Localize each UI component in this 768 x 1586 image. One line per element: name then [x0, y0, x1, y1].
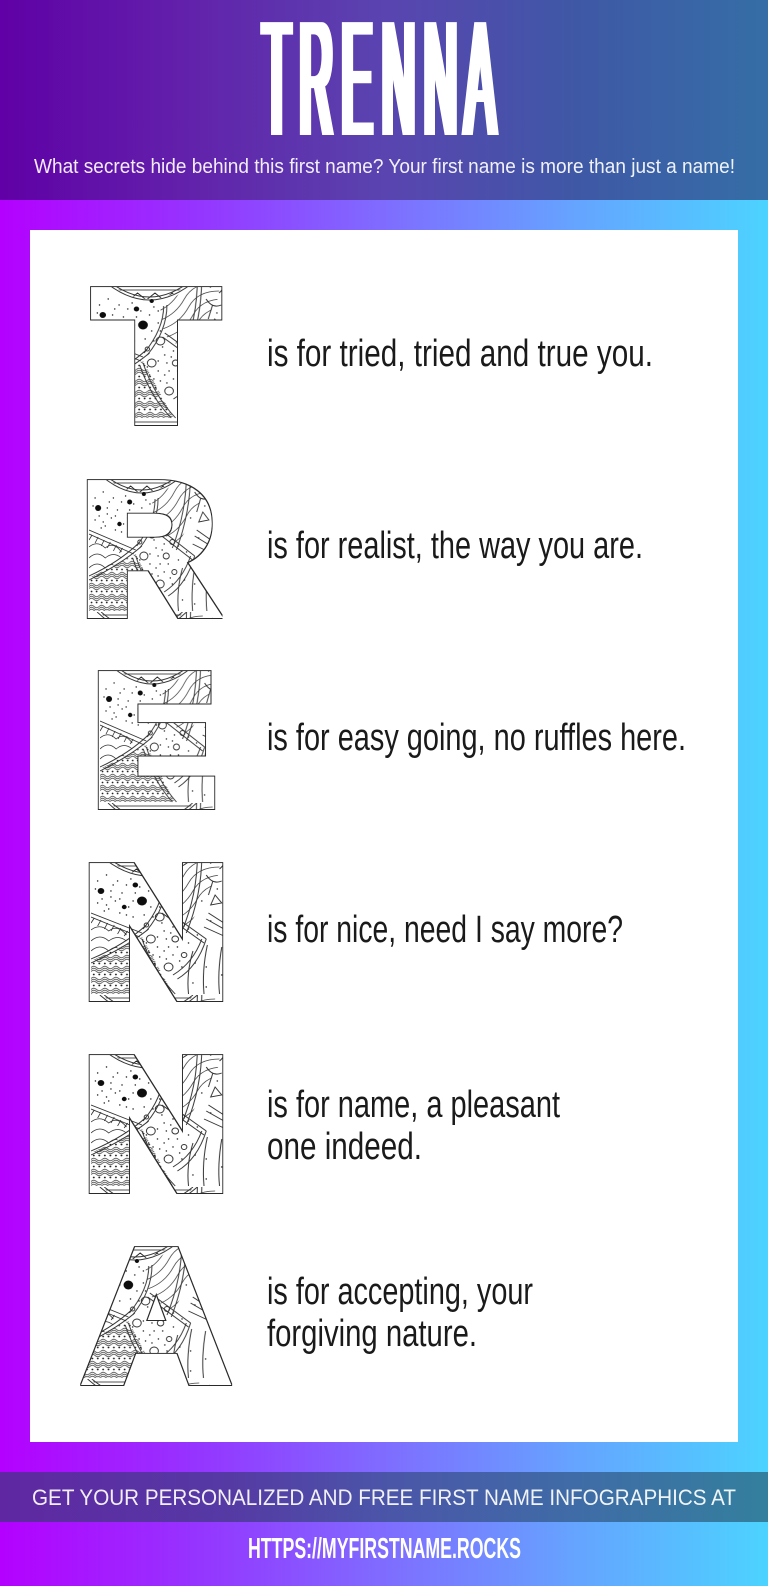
footer url: HTTPS://MYFIRSTNAME.ROCKS [248, 1533, 521, 1565]
footer call-to-action band [0, 1472, 768, 1522]
icon: doodle letter N second: N [83, 1021, 229, 1226]
icon: doodle letter A: A [85, 1214, 227, 1419]
text: R line: is for realist, the way you are. [267, 525, 643, 567]
text: A lines: is for accepting, your [267, 1271, 533, 1313]
footer text: GET YOUR PERSONALIZED AND FREE FIRST NAME INFOGRAPHICS AT [32, 1485, 736, 1510]
row N second [83, 1021, 560, 1226]
row E [93, 637, 686, 842]
row R [81, 447, 643, 652]
icon: doodle letter R: R [81, 447, 216, 652]
icon: doodle letter T: T [95, 253, 217, 458]
text: N line: is for nice, need I say more? [267, 909, 623, 951]
header band [0, 0, 768, 200]
text: second N lines: one indeed. [267, 1126, 422, 1168]
row N [83, 829, 623, 1034]
icon: doodle letter N: N [83, 829, 229, 1034]
text: second N lines [267, 1084, 560, 1168]
text: second N lines: is for name, a pleasant [267, 1084, 560, 1126]
text: A lines: forgiving nature. [267, 1313, 477, 1355]
text: A lines [267, 1271, 533, 1355]
white content panel [30, 230, 738, 1442]
text: T line: is for tried, tried and true you. [267, 333, 653, 375]
icon: doodle letter E: E [93, 637, 215, 842]
row T [95, 253, 653, 458]
subtitle: What secrets hide behind this first name? Your first name is more than just a name! [34, 156, 735, 178]
row A [85, 1214, 533, 1419]
